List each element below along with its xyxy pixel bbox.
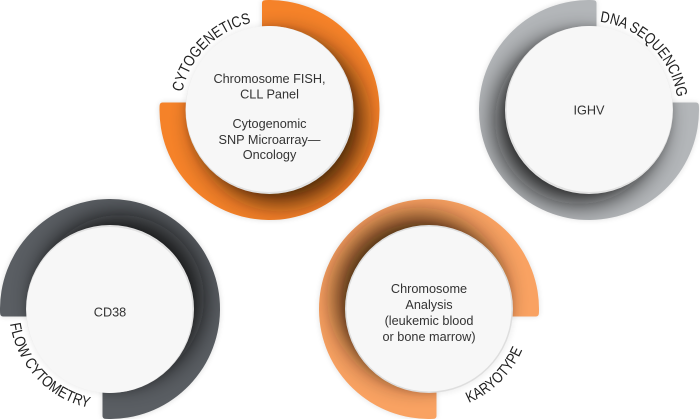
panel: karyotype	[318, 198, 540, 419]
text: CD38: CD38	[94, 306, 126, 320]
text: tests: Cytogenomic	[232, 117, 307, 131]
inner circle	[24, 223, 196, 395]
panel: cytogenetics	[158, 0, 382, 222]
inner circle	[503, 24, 675, 196]
text: IGHV: IGHV	[573, 104, 605, 118]
text: tests: Oncology	[243, 148, 297, 162]
curved label: flow cytometry: FLOW CYTOMETRY	[10, 322, 91, 407]
curved label: dna sequencing: DNA SEQUENCING	[600, 11, 687, 96]
inner circle	[184, 24, 356, 196]
curved label: karyotype: KARYOTYPE	[465, 346, 522, 402]
ring: karyotype	[319, 199, 539, 419]
ring: dna sequencing	[479, 0, 699, 220]
text: tests: CLL Panel	[240, 88, 299, 102]
text: tests: Chromosome FISH,	[213, 72, 326, 86]
panel: flow cytometry	[0, 197, 222, 419]
curved label: cytogenetics: CYTOGENETICS	[172, 13, 250, 90]
ring: cytogenetics	[159, 0, 379, 220]
ring: flow cytometry	[0, 199, 220, 419]
text: chromosome analysis: or bone marrow)	[382, 330, 476, 344]
text: tests: SNP Microarray—	[218, 133, 321, 147]
text: chromosome analysis: Chromosome	[391, 282, 467, 296]
text: chromosome analysis: Analysis	[405, 298, 453, 312]
text: chromosome analysis: (leukemic blood	[385, 314, 473, 328]
panel: dna sequencing	[478, 0, 700, 222]
inner circle	[343, 223, 515, 395]
